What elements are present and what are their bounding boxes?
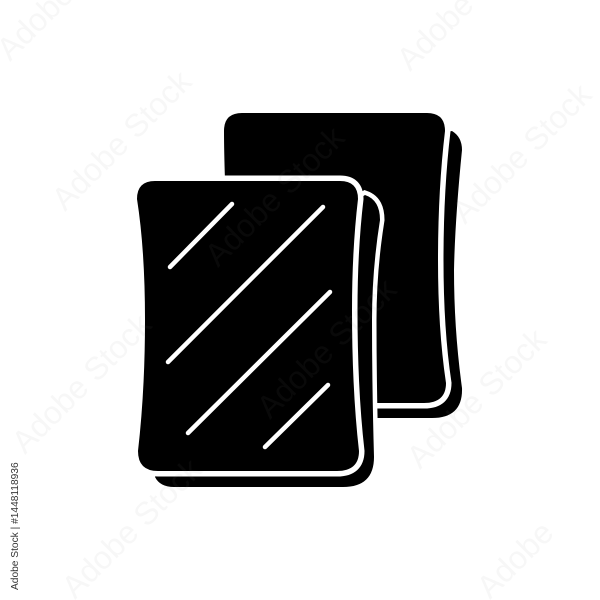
watermark pattern: Adobe Stock	[44, 62, 199, 217]
watermark pattern: Adobe Stock	[249, 270, 404, 425]
icon: back toast slice	[224, 113, 462, 418]
toast highlight lines	[168, 204, 330, 447]
front slice outline gap	[137, 181, 359, 471]
icon: front toast slice	[137, 181, 380, 487]
front slice shadow layer	[155, 195, 380, 487]
back slice shadow layer	[340, 131, 462, 418]
back slice outline gap	[224, 113, 446, 403]
watermark pattern: Adobe Stock	[444, 75, 599, 230]
watermark pattern: Adobe Stock	[197, 118, 352, 273]
stock id caption: Adobe Stock | #1448118936	[10, 462, 21, 590]
watermark pattern: Adobe Stock	[399, 320, 554, 475]
watermark pattern: Adobe Stock	[4, 305, 159, 460]
